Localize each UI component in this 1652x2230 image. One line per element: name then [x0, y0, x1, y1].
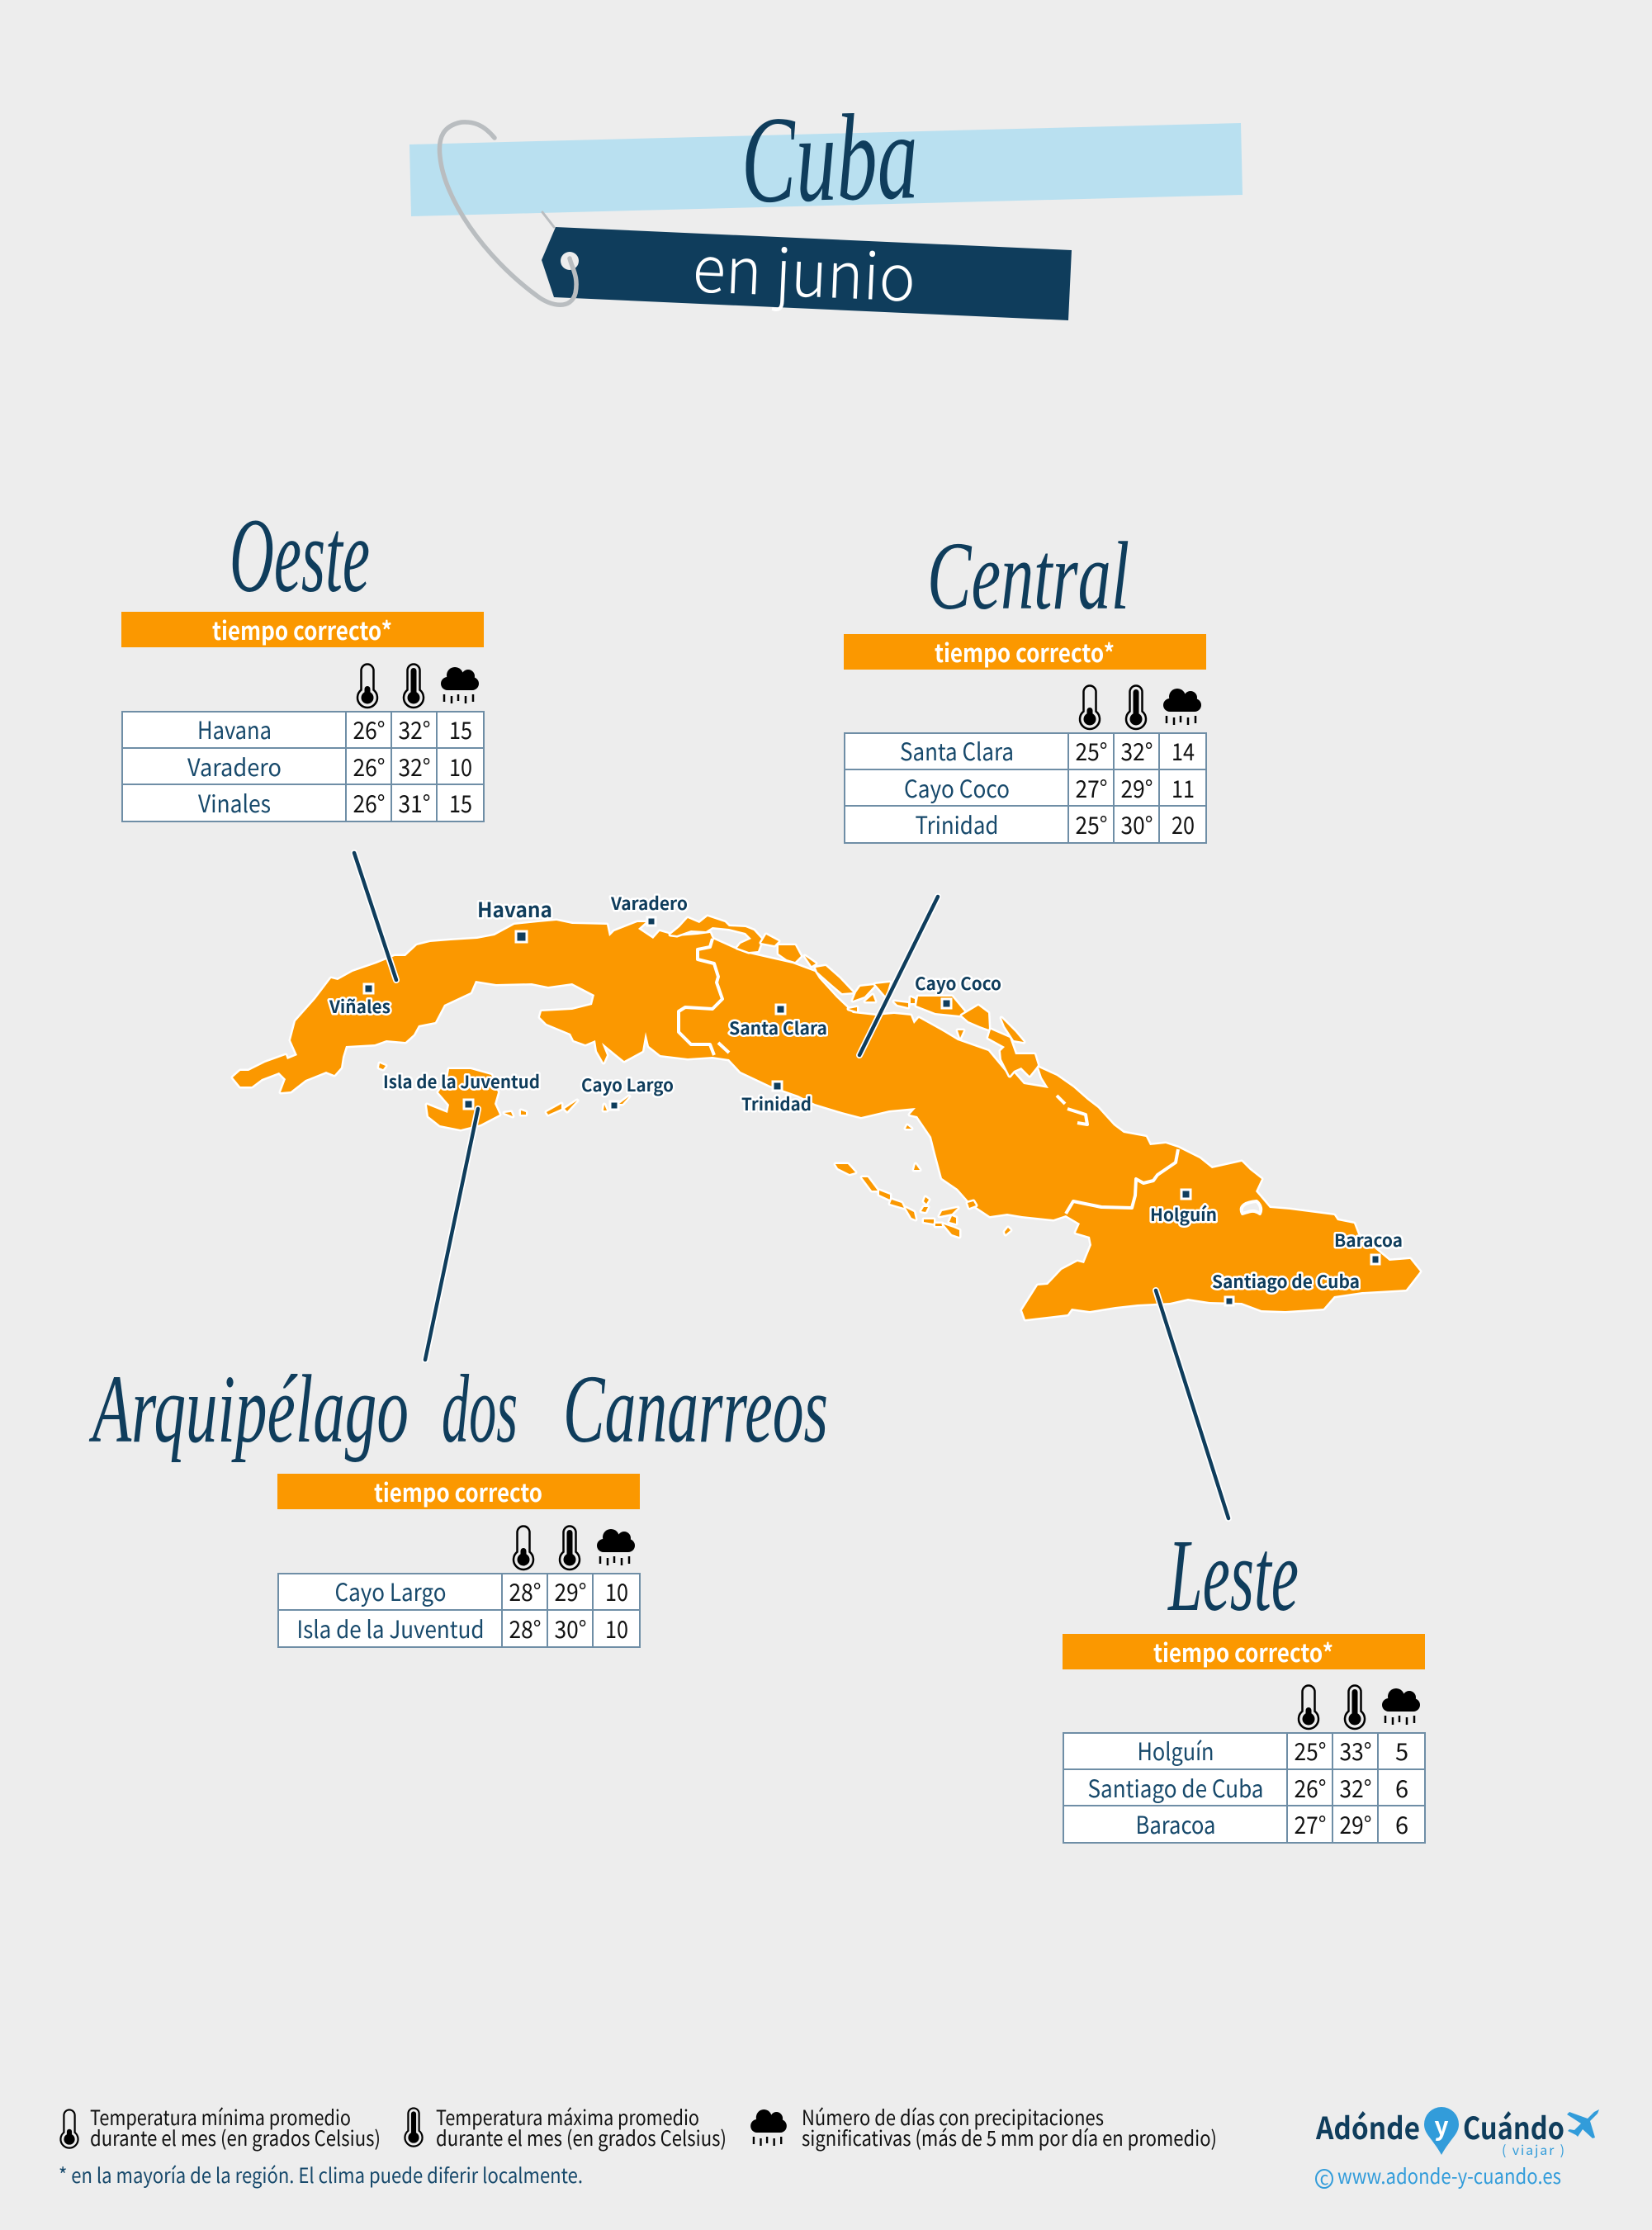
table icons	[357, 664, 479, 708]
tag: month	[542, 218, 1072, 320]
climate table: 28°	[509, 1611, 542, 1645]
climate table: 31°	[398, 785, 431, 820]
climate table: Trinidad	[915, 807, 999, 841]
website: c	[1320, 2166, 1329, 2190]
climate table: 26°	[353, 749, 385, 784]
climate table: 29°	[1121, 770, 1153, 805]
climate table: 32°	[398, 749, 431, 784]
climate table: 28°	[509, 1574, 542, 1608]
climate table	[1063, 1733, 1425, 1843]
climate table: Cayo Largo	[335, 1574, 446, 1608]
climate table: 30°	[1121, 807, 1153, 841]
climate table	[845, 733, 1206, 843]
climate table: Havana	[197, 712, 272, 746]
city labels: Santiago de Cuba	[1212, 1269, 1360, 1294]
climate table: Baracoa	[1136, 1806, 1215, 1841]
weather label bar: tiempo correcto	[374, 1473, 542, 1509]
panel: Leste	[1063, 1519, 1425, 1843]
climate table: 25°	[1075, 733, 1108, 768]
city labels: Santa Clara	[729, 1016, 827, 1040]
city labels: Viñales	[329, 994, 391, 1019]
legend text: minimum: Temperatura mínima promedio	[90, 2102, 351, 2132]
map of Cuba	[233, 853, 1420, 1518]
panel: Central	[844, 522, 1206, 843]
city labels: Cayo Coco	[915, 971, 1001, 996]
city labels: Trinidad	[741, 1091, 812, 1116]
climate table: 25°	[1295, 1733, 1326, 1768]
region borders	[679, 939, 1261, 1214]
climate table: Santa Clara	[900, 733, 1014, 768]
logo	[1315, 2104, 1599, 2190]
weather label bar	[844, 633, 1206, 670]
climate table: 10	[605, 1574, 628, 1608]
weather label bar	[1063, 1633, 1425, 1669]
climate table: 10	[605, 1611, 628, 1645]
table icons	[514, 1526, 635, 1570]
climate table: 32°	[398, 712, 431, 746]
weather label bar: tiempo correcto*	[212, 611, 392, 647]
tag string	[439, 122, 576, 305]
city labels: Varadero	[610, 891, 688, 916]
legend text: maximum: durante el mes (en grados Celsius)	[436, 2123, 727, 2152]
weather label bar	[121, 611, 484, 647]
climate table: 25°	[1075, 807, 1108, 841]
climate table: 14	[1172, 733, 1195, 768]
climate table: Isla de la Juventud	[297, 1611, 484, 1645]
city markers	[364, 917, 1380, 1305]
icon: plane	[1567, 2109, 1599, 2138]
land: main island and cays	[233, 916, 1420, 1319]
legend	[59, 2102, 1217, 2190]
city labels: Havana	[477, 894, 552, 924]
climate table: 30°	[555, 1611, 586, 1645]
heading: Leste: Leste	[1167, 1519, 1299, 1633]
logo tagline: ( viajar )	[1502, 2139, 1564, 2159]
climate table: Vinales	[198, 785, 271, 820]
climate table: Santiago de Cuba	[1088, 1770, 1263, 1805]
climate table: 32°	[1339, 1770, 1372, 1805]
logo word: Cuándo: Cuándo	[1463, 2104, 1564, 2148]
weather label bar	[277, 1473, 640, 1509]
climate table: Varadero	[187, 749, 282, 784]
title block	[409, 88, 1243, 320]
heading: Arquipélago dos Canarreos	[88, 1355, 828, 1463]
climate table	[122, 712, 484, 821]
icon: maximum temperature	[405, 2108, 423, 2147]
logo pin: y	[1434, 2106, 1449, 2142]
climate table: 10	[449, 749, 472, 784]
climate table: 33°	[1339, 1733, 1372, 1768]
panel: Arquipelago dos Canarreos	[88, 1355, 828, 1647]
legend text: rain	[802, 2102, 1217, 2152]
legend text: rain: Número de días con precipitaciones	[802, 2102, 1104, 2132]
climate table: 5	[1395, 1733, 1408, 1768]
heading: Arquipélago dos Canarreos: Arquipélago	[88, 1355, 409, 1463]
climate table: Holguín	[1138, 1733, 1214, 1768]
climate table: 26°	[1295, 1770, 1326, 1805]
climate table: Cayo Coco	[904, 770, 1010, 805]
climate table: 11	[1172, 770, 1195, 805]
icon: rain	[750, 2109, 787, 2146]
climate table: 6	[1395, 1770, 1408, 1805]
leader lines	[354, 853, 1228, 1518]
city labels: Baracoa	[1334, 1228, 1403, 1252]
heading: Central: Central	[927, 522, 1129, 630]
climate table	[278, 1574, 640, 1647]
heading: Oeste: Oeste	[230, 497, 370, 614]
city labels: Holguín	[1150, 1202, 1217, 1227]
table icons	[1080, 685, 1201, 729]
table icons	[1299, 1686, 1420, 1729]
city labels	[329, 891, 1403, 1294]
weather label bar: tiempo correcto*	[935, 633, 1115, 670]
climate table: 29°	[1339, 1806, 1372, 1841]
city labels: Isla de la Juventud	[383, 1069, 540, 1094]
climate table: 27°	[1075, 770, 1108, 805]
website: www.adonde-y-cuando.es	[1337, 2161, 1561, 2190]
heading: Arquipélago dos Canarreos: Canarreos	[563, 1355, 828, 1463]
panel: Oeste	[121, 497, 484, 821]
city labels: Cayo Largo	[581, 1072, 674, 1097]
climate table: 6	[1395, 1806, 1408, 1841]
legend text: rain: significativas (más de 5 mm por día en promedio)	[802, 2123, 1217, 2152]
legend text: minimum	[90, 2102, 381, 2152]
climate table: 26°	[353, 712, 385, 746]
title: Cuba: Cuba	[740, 88, 920, 230]
logo pin	[1424, 2106, 1459, 2155]
climate table: 20	[1172, 807, 1195, 841]
legend text: maximum	[436, 2102, 727, 2152]
icon: minimum temperature	[60, 2109, 78, 2148]
heading: Arquipélago dos Canarreos: dos	[442, 1355, 518, 1463]
title band	[409, 123, 1243, 216]
legend text: maximum: Temperatura máxima promedio	[436, 2102, 699, 2132]
climate table: 15	[449, 785, 472, 820]
climate table: 32°	[1121, 733, 1153, 768]
tag: month: en junio	[691, 218, 918, 320]
legend text: minimum: durante el mes (en grados Celsius)	[90, 2123, 381, 2152]
climate table: 26°	[353, 785, 385, 820]
footnote: * en la mayoría de la región. El clima puede diferir localmente.	[59, 2160, 583, 2190]
logo word: Adónde: Adónde	[1315, 2104, 1420, 2148]
weather label bar: tiempo correcto*	[1153, 1633, 1333, 1669]
climate table: 27°	[1295, 1806, 1326, 1841]
climate table: 29°	[555, 1574, 586, 1608]
climate table: 15	[449, 712, 472, 746]
